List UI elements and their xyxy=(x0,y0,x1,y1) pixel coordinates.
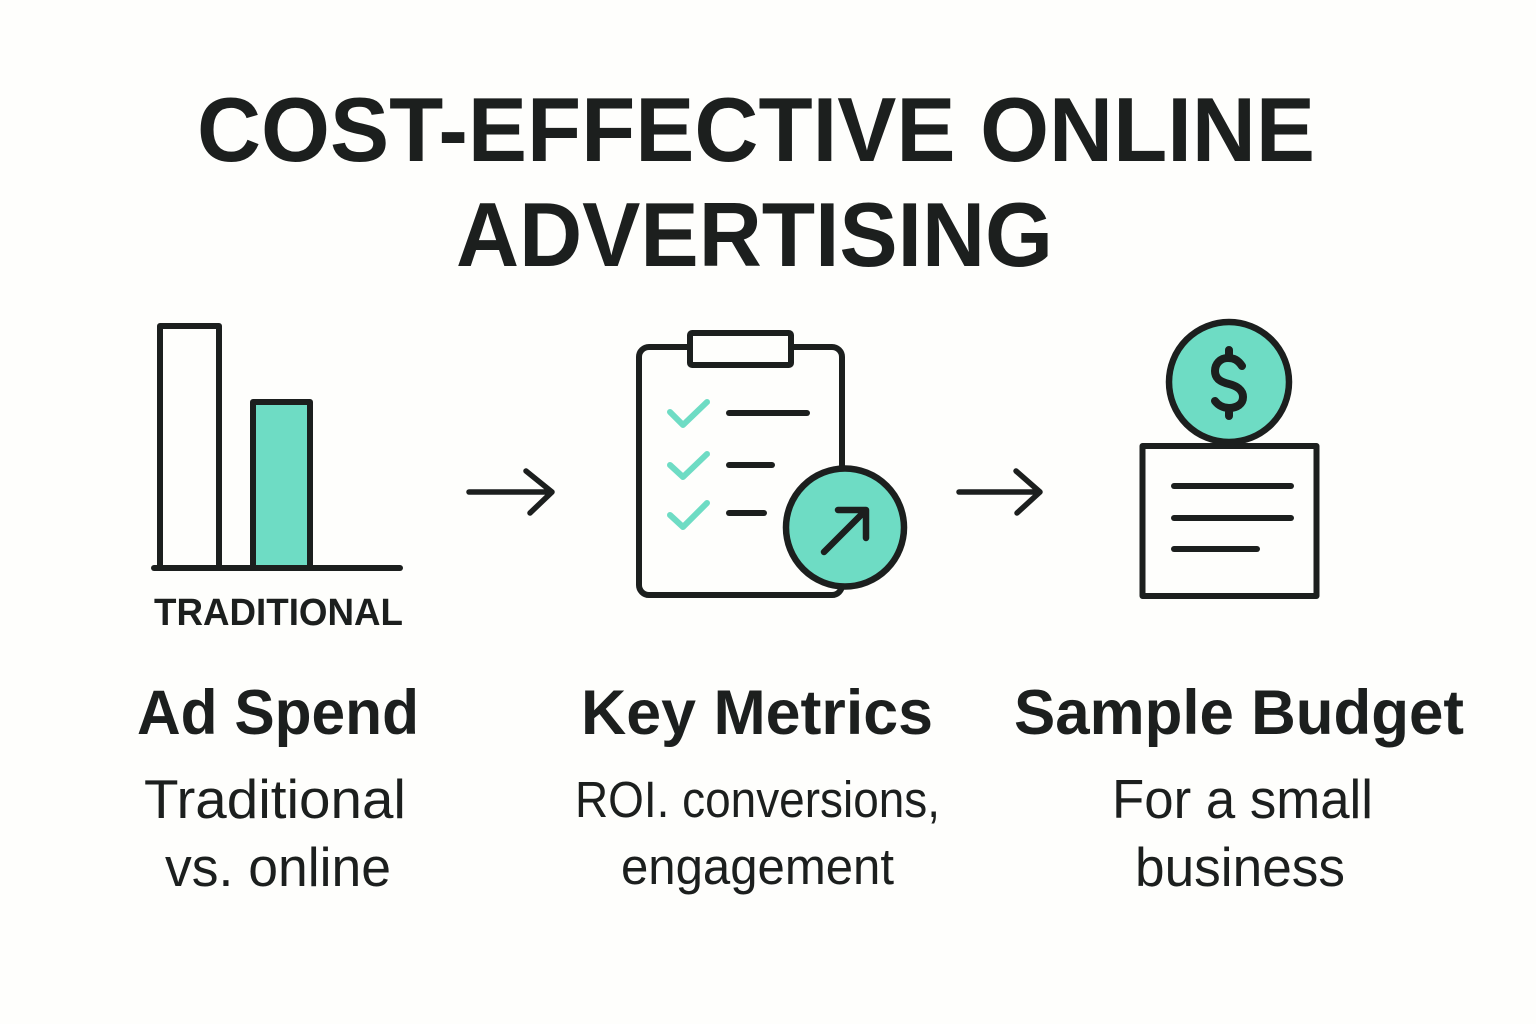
title: ADVERTISING xyxy=(456,185,1053,286)
column: sample budget: For a small xyxy=(1112,768,1373,830)
title: COST-EFFECTIVE ONLINE xyxy=(197,80,1315,181)
arrow: key metrics to sample budget xyxy=(959,471,1040,513)
icon: clipboard checklist with growth badge xyxy=(639,333,904,595)
column: ad spend: Traditional xyxy=(144,768,406,830)
column: key metrics: ROI. conversions, xyxy=(575,771,940,828)
icon: bar chart comparing traditional and online spend xyxy=(154,326,400,568)
checkmarks xyxy=(670,402,707,527)
column: sample budget xyxy=(1014,678,1464,898)
checklist lines xyxy=(729,413,807,513)
column: key metrics: Key Metrics xyxy=(581,678,933,748)
title xyxy=(197,80,1315,286)
icon: dollar coin over budget document xyxy=(1142,322,1316,596)
column: key metrics xyxy=(575,678,940,895)
column: sample budget: business xyxy=(1135,836,1345,898)
growth badge xyxy=(786,468,904,586)
column: sample budget: Sample Budget xyxy=(1014,678,1464,748)
column: ad spend xyxy=(137,678,419,898)
chart label: traditional: TRADITIONAL xyxy=(154,592,403,634)
column: ad spend: Ad Spend xyxy=(137,678,419,748)
column: key metrics: engagement xyxy=(621,838,894,895)
arrow: ad spend to key metrics xyxy=(469,471,552,513)
column: ad spend: vs. online xyxy=(165,836,391,898)
